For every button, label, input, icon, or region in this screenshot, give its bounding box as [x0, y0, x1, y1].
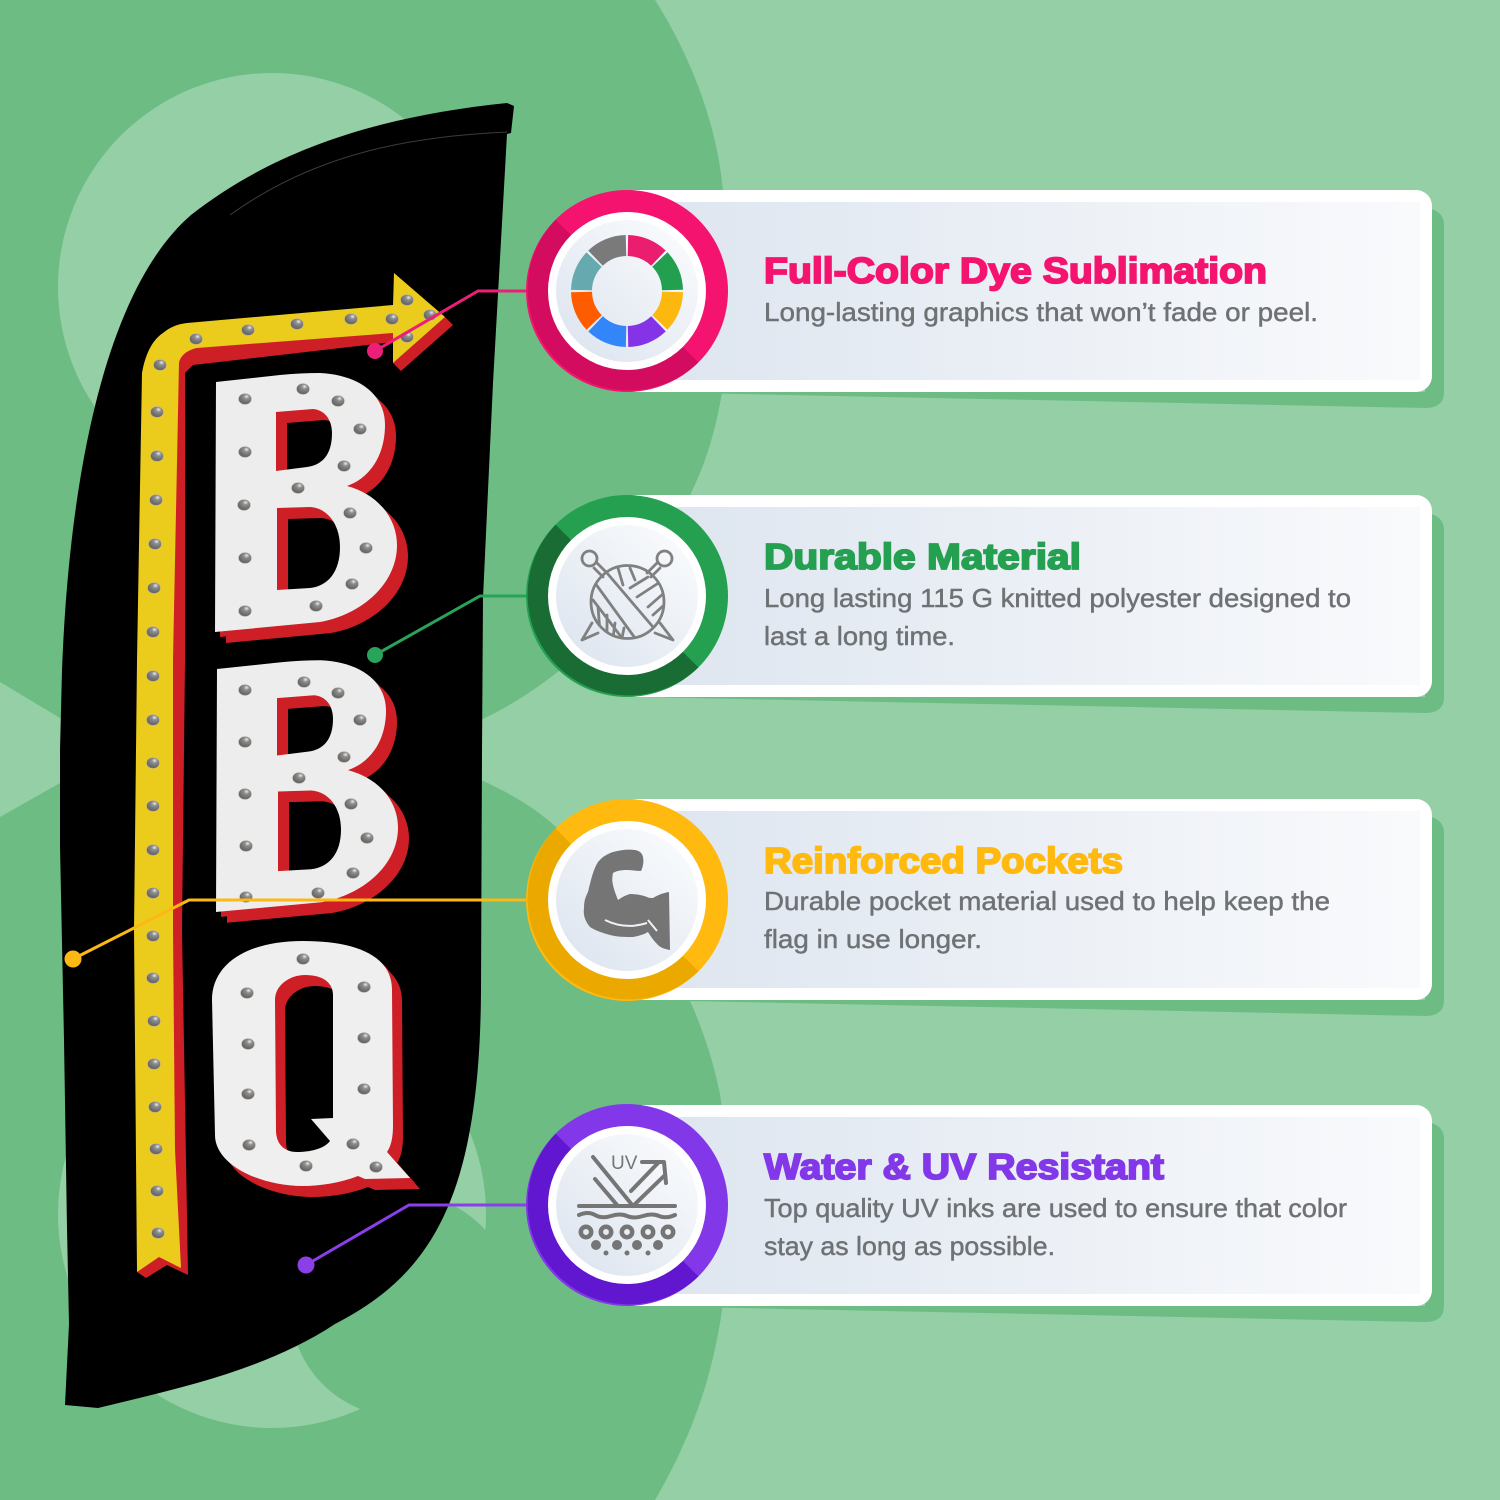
icon ring: yarn: [526, 495, 728, 697]
icon: yarn ball and needles: [582, 551, 673, 640]
connector: pink: [367, 291, 530, 359]
card shadow: [640, 208, 1444, 408]
card panel: [620, 190, 1432, 392]
card panel: [620, 799, 1432, 1000]
card panel: [620, 1105, 1432, 1306]
connector: yellow: [64, 900, 530, 968]
description: Durable pocket material used to help keep the: [764, 886, 1330, 916]
card: durable material: last a long time.: [764, 621, 955, 651]
icon ring: color wheel: [526, 190, 728, 392]
flag seam: [230, 132, 507, 215]
icon: color wheel: [563, 227, 691, 355]
card shadow: [640, 816, 1444, 1016]
marquee light bulbs: [146, 294, 436, 1238]
flag: [60, 103, 514, 1408]
card: reinforced pockets: [620, 799, 1444, 1016]
description: Long lasting 115 G knitted polyester designed to: [764, 583, 1351, 613]
card panel: [620, 495, 1432, 697]
heading: Full-Color Dye Sublimation: [764, 250, 1267, 291]
connector: green: [367, 596, 530, 663]
letter B middle: [216, 660, 409, 923]
card shadow: [640, 1122, 1444, 1322]
icon: uv protection: UV: [611, 1153, 638, 1174]
heading: Water & UV Resistant: [764, 1146, 1164, 1187]
card: water and uv resistant: stay as long as possible.: [764, 1231, 1055, 1261]
letter Q: [212, 941, 420, 1197]
icon: uv protection: [579, 1153, 675, 1256]
card: durable material: [620, 495, 1444, 713]
icon: flexed arm: [584, 850, 670, 950]
marquee arrow: [134, 273, 453, 1278]
card: water and uv resistant: [620, 1105, 1444, 1322]
heading: Reinforced Pockets: [764, 840, 1123, 881]
heading: Durable Material: [764, 536, 1081, 577]
description: Long-lasting graphics that won’t fade or peel.: [764, 297, 1318, 327]
card shadow: [640, 513, 1444, 713]
connector: purple: [298, 1205, 530, 1274]
icon ring: uv: [526, 1104, 728, 1306]
card: full-color dye sublimation: [620, 190, 1444, 408]
card: reinforced pockets: flag in use longer.: [764, 924, 982, 954]
flag body: [60, 103, 514, 1408]
icon ring: muscle: [526, 799, 728, 1001]
description: Top quality UV inks are used to ensure that color: [764, 1193, 1347, 1223]
letter B top: [215, 373, 408, 643]
